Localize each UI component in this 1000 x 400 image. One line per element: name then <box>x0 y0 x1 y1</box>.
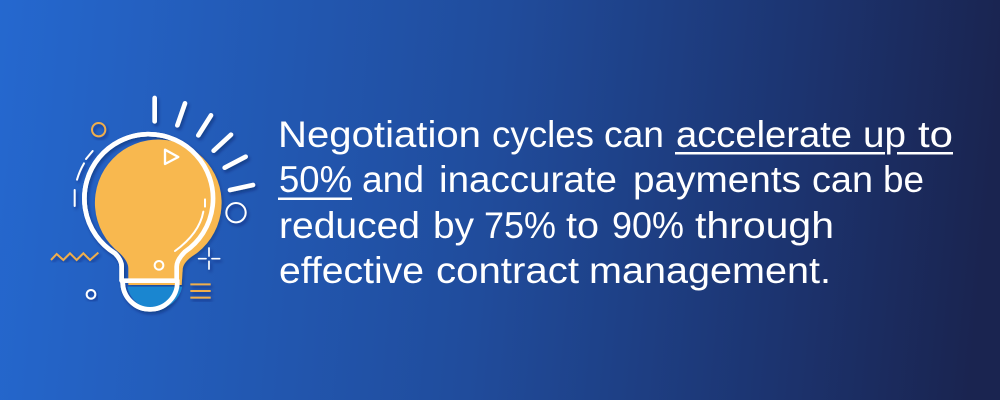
white ring <box>226 203 246 222</box>
line 3: 75% <box>484 204 556 246</box>
line 2: 50% <box>279 158 352 200</box>
line 3: reduced <box>279 204 420 246</box>
orange ring <box>92 123 105 136</box>
underline: 50% <box>278 198 352 200</box>
bulb blue base <box>127 287 182 309</box>
outline shadow <box>84 134 213 309</box>
line 4: contract <box>436 249 580 291</box>
line 2: can <box>812 158 873 200</box>
line 4: effective <box>279 249 424 291</box>
bulb yellow fill <box>95 140 222 285</box>
dashed arc <box>75 151 93 206</box>
line 1: to <box>918 113 953 155</box>
light rays <box>155 98 253 190</box>
line 4 <box>279 249 831 291</box>
line 1: can <box>604 113 664 155</box>
line 1: up <box>863 113 906 155</box>
small white ring <box>87 290 95 299</box>
line 2 <box>279 158 924 200</box>
line 1: Negotiation <box>278 113 481 155</box>
line 3: by <box>433 204 474 246</box>
line 2: be <box>883 158 924 200</box>
line 3: 90% <box>612 204 684 246</box>
statement text <box>278 113 953 291</box>
icon: light bulb <box>51 98 253 309</box>
white sparkle <box>199 248 220 269</box>
line 2: inaccurate <box>439 158 617 200</box>
line 3: to <box>566 204 599 246</box>
line 1 <box>278 113 953 155</box>
line 1: cycles <box>492 113 594 155</box>
bulb highlight <box>175 199 205 251</box>
bulb white outline <box>84 134 213 309</box>
orange zigzag <box>51 253 98 260</box>
small circle in bulb <box>155 261 163 270</box>
line 2: and <box>362 158 424 200</box>
line 1: accelerate <box>676 113 852 155</box>
line 4: management. <box>589 249 831 291</box>
line 2: payments <box>633 158 801 200</box>
underline: accelerate up to <box>675 152 953 154</box>
line 3 <box>279 204 834 246</box>
line 3: through <box>695 204 834 246</box>
icon: play triangle <box>165 150 178 164</box>
orange lines <box>190 284 211 298</box>
